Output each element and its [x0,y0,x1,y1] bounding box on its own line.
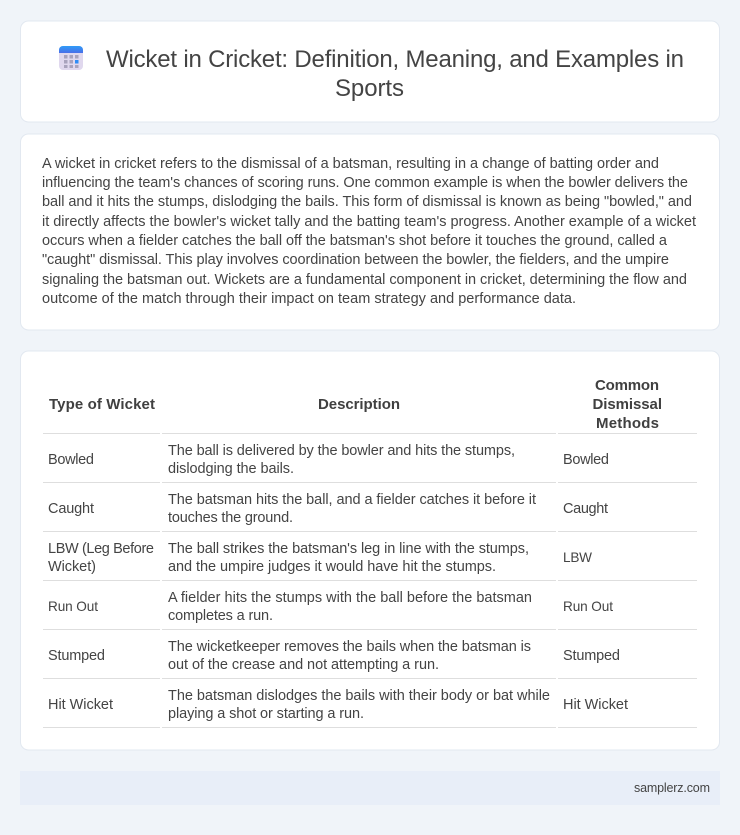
table header: Type of Wicket [49,396,155,413]
table row: LBW: LBW (Leg Before [48,541,154,557]
text block: definition of wicket: occurs when a fielder catches the ball off the batsman's shot before it touches the ground, called a [42,233,668,249]
table row: Caught: Caught [563,501,608,517]
text block: definition of wicket: ball and it hits the stumps, dislodging the bails. This form of dismissal is known as being "bowled," and [42,194,692,210]
table row: Bowled: Bowled [48,452,94,468]
table row: LBW: Wicket) [48,559,96,575]
table header: Methods [596,415,659,432]
table header: Description [318,396,400,413]
table row: Stumped: The wicketkeeper removes the bails when the batsman is [168,639,531,655]
title: Sports [335,75,404,102]
table row: Hit Wicket [48,688,628,722]
table row: Caught: The batsman hits the ball, and a fielder catches it before it [168,492,536,508]
table row: Hit Wicket: playing a shot or starting a run. [168,706,364,722]
table row: Hit Wicket: The batsman dislodges the bails with their body or bat while [168,688,550,704]
table row: Run Out: Run Out [563,599,613,614]
text block: definition of wicket: "caught" dismissal. This play involves coordination between the bowler, the fielders, and the umpire [42,252,669,268]
title: Wicket in Cricket: Definition, Meaning, and Examples in [106,46,684,73]
text block: definition of wicket: signaling the batsman out. Wickets are a fundamental component in cricket, determining the flow and [42,272,687,288]
text block: definition of wicket: it directly affects the bowler's wicket tally and the batting team's progress. Another example of a wicket [42,214,696,230]
table row: Stumped [48,639,620,673]
panel: intro paragraph [20,134,720,330]
text block: definition of wicket: influencing the team's chances of scoring runs. One common example is when the bowler delivers the [42,175,688,191]
table header [49,377,662,432]
table row: LBW: The ball strikes the batsman's leg in line with the stumps, [168,541,529,557]
title [106,46,684,102]
table row: Run Out: Run Out [48,599,98,614]
table row: Caught: Caught [48,501,94,517]
table row: Run Out: completes a run. [168,608,273,624]
table header: Common [595,377,659,394]
table row: Hit Wicket: Hit Wicket [563,697,628,713]
table row: Bowled: dislodging the bails. [168,461,294,477]
table row: Stumped: out of the crease and not attempting a run. [168,657,439,673]
text block: definition of wicket: outcome of the match through their impact on team strategy and performance data. [42,291,576,307]
table row: Bowled: Bowled [563,452,609,468]
footer bar [20,771,720,805]
icon: calendar [59,46,83,70]
text block: definition of wicket: A wicket in cricket refers to the dismissal of a batsman, resulting in a change of batting order and [42,156,659,172]
text block: definition of wicket [42,156,696,307]
table row: LBW: LBW [563,550,592,565]
table row: LBW [48,541,592,575]
table row: Bowled: The ball is delivered by the bowler and hits the stumps, [168,443,515,459]
panel: wicket types table [20,351,720,750]
table row: Bowled [48,443,609,477]
table row: Caught [48,492,608,526]
table header: Dismissal [592,396,662,413]
table row: LBW: and the umpire judges it would have hit the stumps. [168,559,496,575]
table row: Stumped: Stumped [48,648,105,664]
table row: Stumped: Stumped [563,648,620,664]
table row: Hit Wicket: Hit Wicket [48,697,113,713]
table row: Run Out [48,590,613,624]
footer source text: samplerz.com [634,781,710,795]
panel: title card [20,21,720,122]
table row: Caught: touches the ground. [168,510,293,526]
table row: Run Out: A fielder hits the stumps with the ball before the batsman [168,590,532,606]
